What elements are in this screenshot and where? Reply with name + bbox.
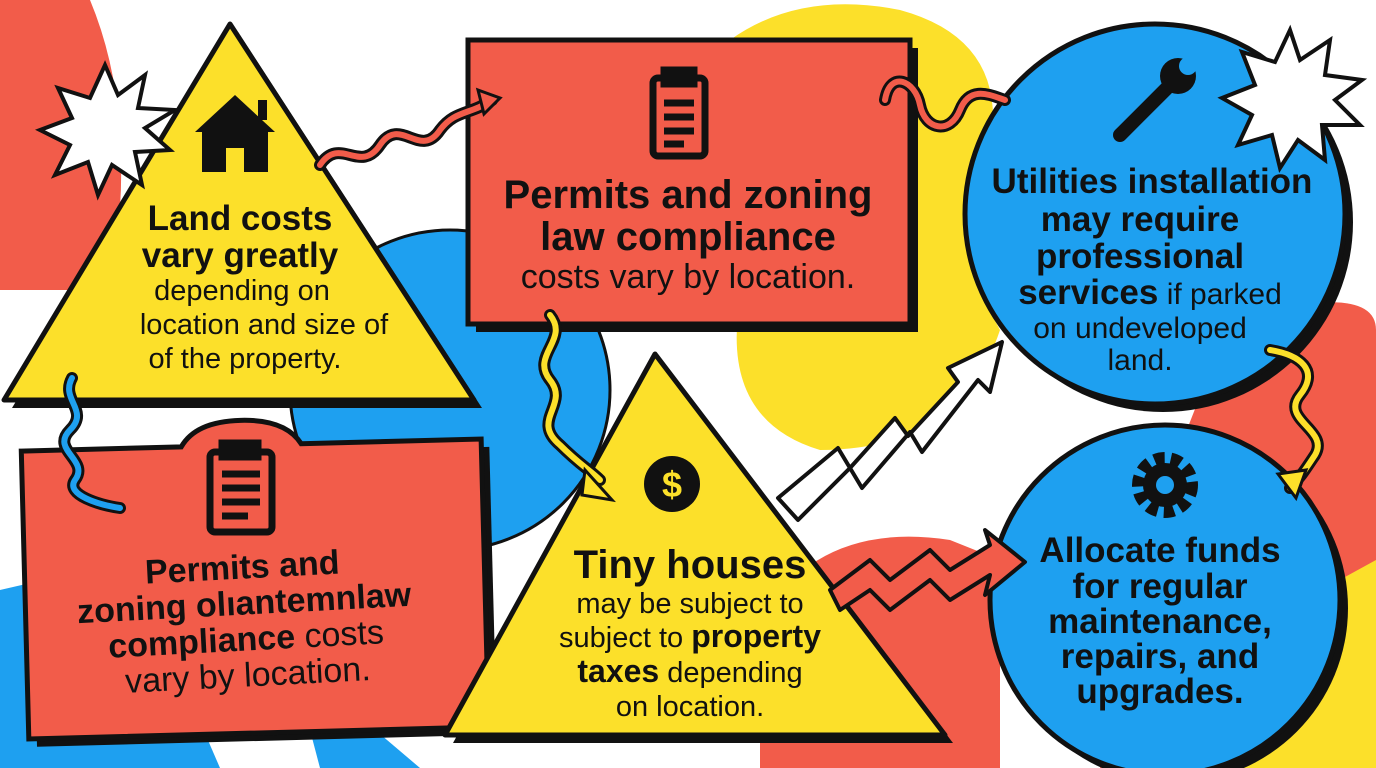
arrow: red zigzag [830, 530, 1025, 610]
icon: clipboard bottom [210, 443, 272, 532]
panel: land costs triangle [4, 24, 482, 408]
text: tiny houses: may be subject to [576, 588, 804, 620]
text: tiny houses: on location. [616, 691, 764, 723]
text: permits bottom: compliance costs [107, 613, 385, 666]
text: utilities: on undeveloped [1033, 312, 1247, 345]
text: land costs: of the property. [149, 343, 341, 375]
text: land costs: depending on [154, 275, 330, 307]
arrow: squiggle top-left to permits [320, 90, 500, 165]
text: tiny houses [559, 543, 821, 723]
text: permits bottom: vary by location. [124, 650, 372, 701]
text: permits top: costs vary by location. [521, 258, 855, 296]
arrow: white zigzag [778, 342, 1002, 520]
text: land costs: vary greatly [142, 236, 339, 275]
text: utilities: services if parked [1018, 273, 1282, 312]
text: utilities: land. [1107, 344, 1173, 377]
text: tiny houses: taxes depending [577, 653, 803, 689]
text: land costs [140, 199, 389, 375]
text: utilities: may require [1041, 200, 1239, 239]
text: permits top: law compliance [540, 215, 836, 259]
panel: utilities circle [965, 24, 1353, 412]
panel: permits top [468, 40, 918, 332]
text: maintenance: upgrades. [1076, 672, 1244, 711]
arrow: squiggle blue left [64, 378, 120, 508]
text: permits top [504, 173, 872, 296]
icon: wrench [1120, 57, 1197, 135]
text: land costs: location and size of [140, 309, 389, 341]
icon: starburst left [40, 65, 175, 195]
text: land costs: Land costs [148, 199, 332, 238]
panel: tiny houses triangle [445, 354, 953, 743]
text: utilities [992, 162, 1312, 377]
icon: gear [1139, 459, 1191, 511]
panel: maintenance circle [990, 425, 1348, 768]
text: utilities: Utilities installation [992, 162, 1312, 201]
icon: clipboard [653, 70, 705, 156]
text: tiny houses: subject to property [559, 618, 821, 654]
text: maintenance [1039, 531, 1281, 711]
icon: house [195, 95, 275, 172]
text: maintenance: repairs, and [1061, 637, 1259, 676]
icon: dollar [644, 456, 700, 512]
panel: permits bottom-left [21, 414, 497, 747]
text: permits bottom: Permits and [144, 544, 340, 592]
text: permits bottom [74, 540, 416, 703]
text: permits bottom: zoning olıantemnlaw [76, 576, 413, 631]
text: utilities: professional [1036, 237, 1244, 276]
icon: starburst right [1222, 30, 1362, 168]
text: maintenance: Allocate funds [1039, 531, 1281, 570]
arrow: squiggle permits to utilities [885, 81, 1005, 126]
text: maintenance: maintenance, [1048, 602, 1272, 641]
text: tiny houses: Tiny houses [574, 543, 806, 587]
text: permits top: Permits and zoning [504, 173, 872, 217]
arrow: squiggle utilities to maintenance [1270, 350, 1318, 498]
text: maintenance: for regular [1072, 567, 1248, 606]
icon: dollar: $ [662, 464, 682, 505]
arrow: squiggle permits to tiny houses [544, 315, 612, 500]
